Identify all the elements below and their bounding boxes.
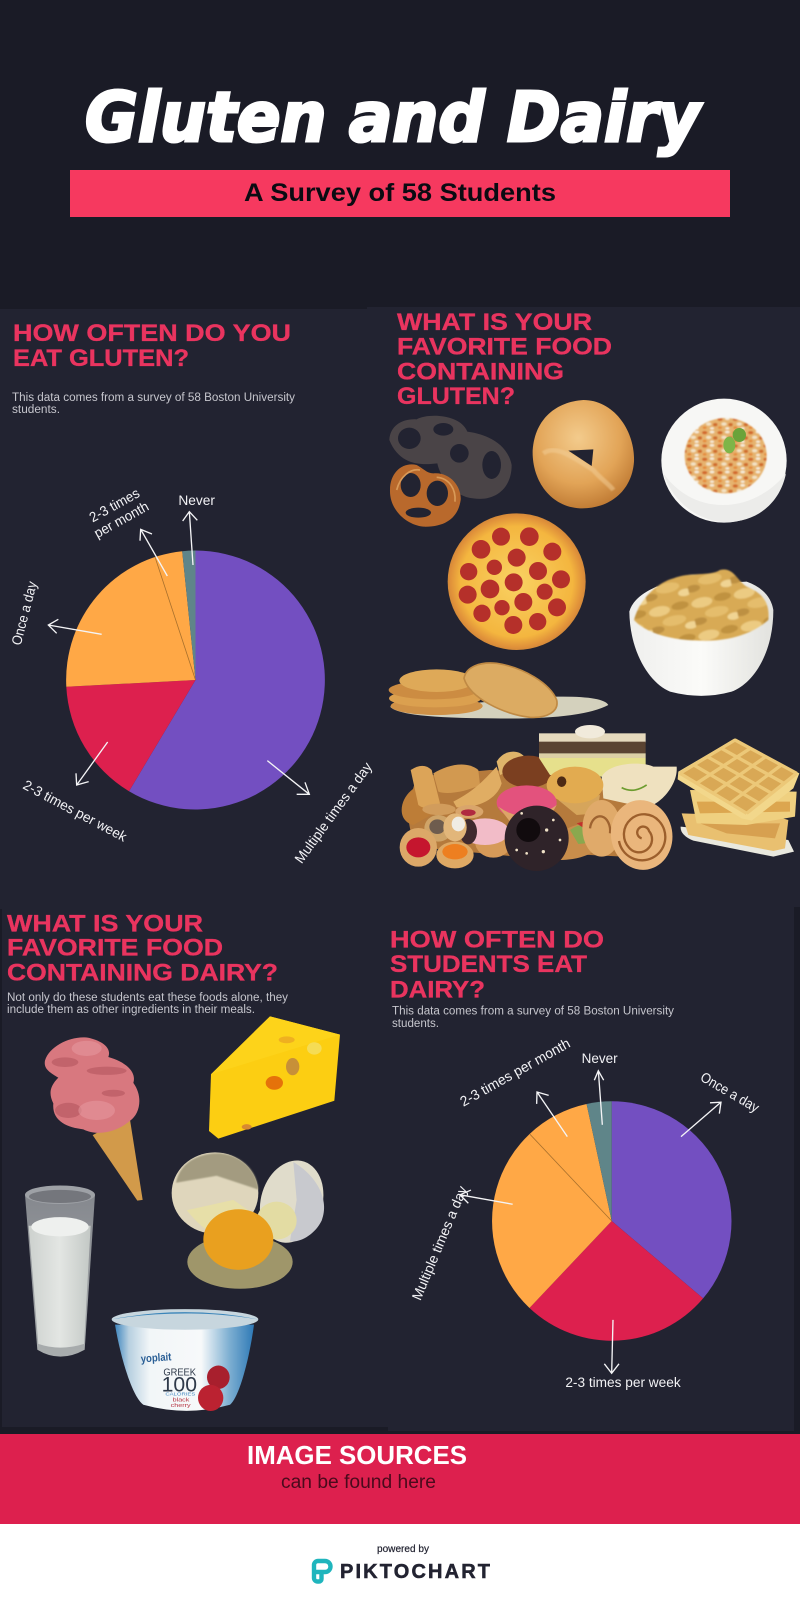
icon: yogurt cup: black (173, 1398, 189, 1404)
icon: yogurt cup: CALORIES (165, 1391, 195, 1397)
heading: favorite gluten food: GLUTEN? (397, 383, 515, 410)
chart labels and arrows: dairy: Never (582, 1050, 618, 1066)
icon: pastry pile (400, 725, 678, 875)
dairy food images (25, 1016, 340, 1411)
subtitle banner: A Survey of 58 Students (244, 179, 556, 207)
heading: favorite dairy food: FAVORITE FOOD (7, 934, 223, 962)
icon: cereal bowl (629, 569, 773, 696)
chart labels and arrows: dairy: Once a day (698, 1069, 763, 1116)
chart labels and arrows: dairy: 2-3 times per month (457, 1035, 573, 1110)
chart labels and arrows: dairy: Multiple times a day (408, 1183, 471, 1302)
heading: favorite gluten food: WHAT IS YOUR (397, 309, 592, 336)
chart labels and arrows: gluten: 2-3 times (86, 485, 142, 525)
text: survey note dairy: students. (392, 1018, 439, 1030)
icon: pepperoni pizza (448, 513, 586, 650)
icon: yogurt cup: 100 (162, 1373, 197, 1396)
heading: how often dairy: DAIRY? (390, 976, 485, 1004)
icon: cracked egg (172, 1152, 333, 1289)
heading: favorite dairy food: WHAT IS YOUR (7, 910, 203, 938)
icon: pretzels (389, 416, 512, 527)
chart labels and arrows: gluten: 2-3 times per week (21, 777, 131, 845)
heading: favorite dairy food (7, 910, 278, 986)
icon: pasta plate (661, 399, 787, 523)
chart labels and arrows: dairy: 2-3 times per week (565, 1374, 682, 1390)
text: dairy note: Not only do these students eat these foods alone, they (7, 992, 288, 1004)
subtitle banner (70, 170, 730, 217)
heading: how often gluten: HOW OFTEN DO YOU (13, 320, 291, 347)
pie chart: gluten frequency (66, 550, 325, 810)
text: survey note gluten: This data comes from a survey of 58 Boston University (12, 392, 295, 404)
footer band: image sources (0, 1434, 800, 1524)
icon: ice cream cone (45, 1037, 143, 1201)
footer: white powered-by strip (0, 1524, 800, 1604)
logo: Piktochart: PIKTOCHART (340, 1561, 490, 1583)
icon: yogurt cup: cherry (171, 1403, 191, 1409)
text: powered by: powered by (377, 1544, 429, 1555)
gluten food images (389, 399, 799, 875)
chart labels and arrows: gluten: per month (91, 498, 151, 541)
panel: how often dairy (388, 903, 794, 1431)
heading: how often dairy (390, 926, 604, 1004)
text: dairy note: include them as other ingredients in their meals. (7, 1004, 255, 1016)
icon: bagel (533, 400, 634, 508)
icon: glass of milk (25, 1185, 95, 1357)
heading: favorite dairy food: CONTAINING DAIRY? (7, 960, 278, 986)
footer band: image sources: IMAGE SOURCES (247, 1440, 467, 1470)
icon: crackers (389, 663, 608, 718)
text: dairy note (7, 992, 288, 1016)
panel: how often gluten (0, 309, 368, 909)
text: survey note gluten: students. (12, 404, 60, 416)
chart labels and arrows: gluten: Never (178, 492, 215, 508)
heading: how often gluten (13, 320, 291, 372)
heading: favorite gluten food: CONTAINING (397, 358, 564, 386)
text: survey note dairy: This data comes from a survey of 58 Boston University (392, 1006, 674, 1018)
panel: favorite dairy food (2, 900, 390, 1427)
icon: cheese wedge (209, 1016, 340, 1139)
chart labels and arrows: gluten (8, 485, 375, 866)
title: Gluten and Dairy (85, 78, 703, 158)
chart labels and arrows: gluten: Multiple times a day (291, 759, 375, 866)
footer band: image sources: can be found here (281, 1472, 436, 1493)
icon: waffles (678, 738, 799, 857)
chart labels and arrows: dairy (408, 1035, 763, 1390)
heading: favorite gluten food: FAVORITE FOOD (397, 334, 612, 360)
icon: yogurt cup (112, 1309, 258, 1411)
heading: how often dairy: STUDENTS EAT (390, 951, 587, 978)
icon: yogurt cup: GREEK (163, 1367, 196, 1379)
chart labels and arrows: gluten: Once a day (8, 579, 40, 647)
heading: favorite gluten food (397, 309, 612, 410)
pie chart: dairy frequency (492, 1101, 731, 1341)
panel: favorite gluten food (367, 307, 800, 907)
icon: yogurt cup: yoplait (140, 1351, 172, 1365)
text: survey note gluten (12, 392, 295, 416)
heading: how often gluten: EAT GLUTEN? (13, 345, 189, 372)
heading: how often dairy: HOW OFTEN DO (390, 926, 604, 954)
text: survey note dairy (392, 1006, 674, 1030)
